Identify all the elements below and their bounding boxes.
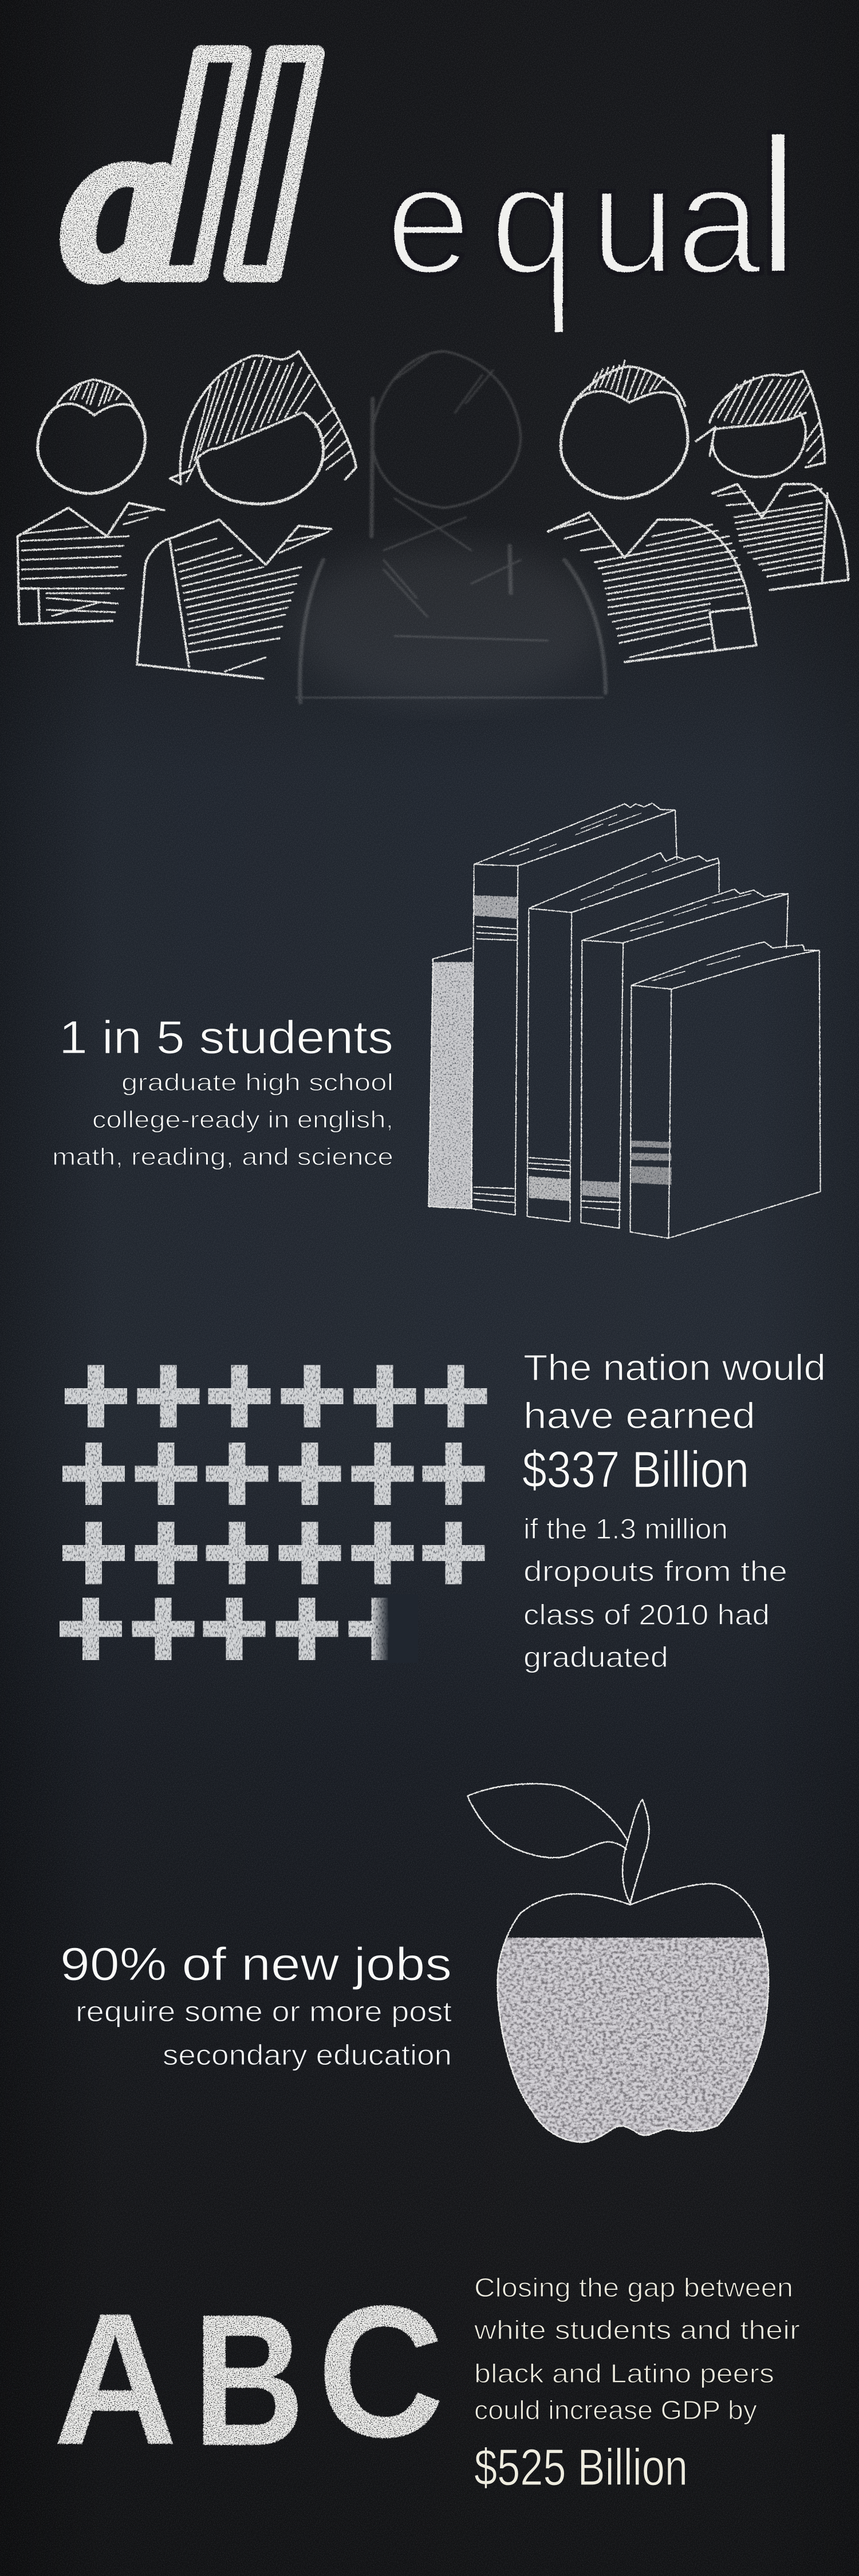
heading [523,1347,826,1436]
stat description: secondary education [163,2039,452,2071]
book 4 [581,889,788,1228]
title: all equal [62,0,800,338]
stat description: graduate high school [121,1069,393,1096]
apple fill [498,1937,769,2142]
student 1 [18,380,164,624]
book 1: filled [428,948,472,1209]
title word: equal: l [756,97,800,315]
description: white students and their [474,2315,800,2345]
stat description: require some or more post [76,1996,452,2028]
heading: have earned [523,1395,755,1436]
chalk letters ABC: A [53,2274,178,2484]
description: dropouts from the [523,1555,787,1587]
description: graduated [523,1641,668,1673]
stat heading: 90% of new jobs [60,1938,452,1990]
section 2 text: nation earnings [522,1347,826,1673]
student 2 [137,351,356,678]
chalk letters ABC: C [317,2266,444,2476]
illustration: apple 90 percent filled [467,1784,778,2151]
apple stem [622,1799,649,1903]
title word: all: l [227,0,317,338]
title word: all: a [62,78,172,322]
section 3 text: 90% of new jobs [60,1938,452,2071]
book 2 [471,803,677,1215]
student 5 [696,371,848,590]
description [474,2273,800,2425]
description: black and Latino peers [474,2358,774,2388]
chalk letters ABC: B [193,2275,305,2485]
stat description [76,1996,452,2071]
book 5 [631,942,821,1238]
student 3: erased [296,351,605,702]
title word: all: l [153,0,243,338]
plus sign icon grid [60,1365,487,1660]
description: could increase GDP by [474,2395,757,2425]
description: class of 2010 had [523,1599,770,1631]
stat description: math, reading, and science [52,1143,393,1170]
amount: $337 Billion: $337 Billion [522,1441,749,1499]
stat heading: 1 in 5 students [59,1012,393,1064]
illustration: stack of books [428,803,821,1238]
stat description [52,1069,393,1170]
title word: all [62,0,317,338]
heading: The nation would [523,1347,826,1388]
description [523,1513,787,1673]
students illustration [18,351,848,702]
apple outline [498,1884,769,2142]
student 4 [548,361,756,662]
chalk letters ABC [53,2266,444,2485]
section 4 text: closing the gap [474,2273,800,2496]
title word: equal: equa [385,134,762,306]
book 3 [527,853,719,1222]
section 1 text: 1 in 5 students [52,1012,393,1170]
apple leaf [467,1784,628,1858]
description: if the 1.3 million [523,1513,728,1545]
amount: $525 Billion: $525 Billion [474,2439,688,2496]
title word: equal [385,97,800,332]
description: Closing the gap between [474,2273,793,2302]
stat description: college-ready in english, [92,1106,393,1133]
